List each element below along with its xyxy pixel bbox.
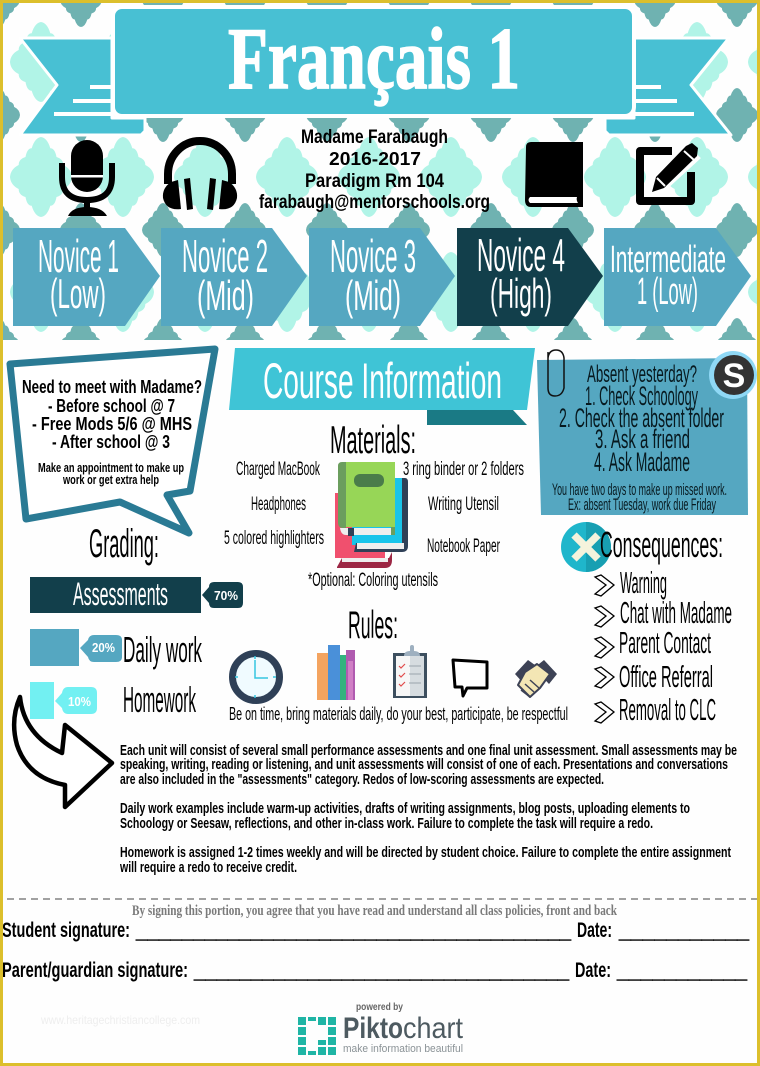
left ribbon tail xyxy=(20,38,145,135)
panel: meeting speech bubble: Need to meet with Madame? xyxy=(22,377,202,397)
chevron: Intermediate 1 xyxy=(604,228,751,326)
chevron: Novice 2: (Mid) xyxy=(197,272,254,319)
chevron: Novice 3 xyxy=(309,228,455,326)
icon: book xyxy=(525,142,583,207)
panel: absent yesterday note xyxy=(537,358,748,515)
materials list: Charged MacBook xyxy=(236,459,320,480)
icon: X circle xyxy=(561,522,611,572)
materials list: Headphones xyxy=(251,494,306,515)
teacher contact information xyxy=(259,127,490,213)
level chevrons xyxy=(13,228,751,326)
text: Daily work xyxy=(123,629,202,670)
icon: microphone xyxy=(62,140,112,216)
icon: paperclip xyxy=(548,350,564,396)
chevron: Novice 1: Novice 1 xyxy=(38,230,119,282)
icon: Schoology badge xyxy=(709,351,757,399)
icon: colored books xyxy=(317,645,355,700)
heading: Materials: Materials: xyxy=(330,419,416,462)
panel: meeting speech bubble: Make an appointment to make up xyxy=(38,460,184,475)
text block: grading explanation xyxy=(119,742,737,876)
student signature line: ___________ xyxy=(618,920,749,943)
materials list xyxy=(224,459,524,591)
parent signature line: Parent/guardian signature: xyxy=(2,959,188,982)
icon: headphones xyxy=(163,141,237,210)
text: Homework xyxy=(123,679,196,720)
teacher contact information: farabaugh@mentorschools.org xyxy=(259,192,490,213)
panel: meeting speech bubble xyxy=(10,349,215,533)
panel: meeting speech bubble: work or get extra help xyxy=(62,472,159,487)
icon: pencil and pad xyxy=(640,143,698,201)
consequences list xyxy=(595,565,732,727)
consequence 3 xyxy=(595,625,711,660)
icon: stack of books xyxy=(335,462,408,568)
parent signature line: Date: xyxy=(575,959,611,982)
text: Grading: xyxy=(89,522,159,566)
materials list: 3 ring binder or 2 folders xyxy=(403,459,524,480)
student signature line: Date: xyxy=(577,919,612,942)
student signature line: Student signature: xyxy=(2,919,130,942)
chevron: Novice 3: Novice 3 xyxy=(330,230,416,282)
teacher contact information: Madame Farabaugh xyxy=(301,127,448,148)
materials list: Writing Utensil xyxy=(428,494,499,515)
student signature line: ______________________________________ xyxy=(135,920,571,943)
parent signature line xyxy=(2,959,747,983)
chevron: Novice 1 xyxy=(13,228,160,326)
title banner xyxy=(113,7,634,116)
heading banner: Course Information: Course Information xyxy=(263,353,502,409)
bar: assessments 70%: 70% xyxy=(214,588,238,603)
chevron: Novice 1: (Low) xyxy=(50,270,106,317)
consequence 4 xyxy=(595,659,713,694)
arrow: hand-drawn pointing right xyxy=(14,697,112,807)
consequence 1 xyxy=(595,565,667,600)
icon: Schoology badge: S xyxy=(723,357,745,395)
right ribbon tail xyxy=(605,38,731,135)
powered by Piktochart logo: make information beautiful xyxy=(343,1043,463,1055)
powered by Piktochart logo: chart xyxy=(403,1012,464,1045)
student signature line xyxy=(2,919,749,943)
consequence 2 xyxy=(595,595,732,630)
materials list: Notebook Paper xyxy=(427,536,500,557)
bar: homework 10% xyxy=(30,679,196,720)
teacher contact information: Paradigm Rm 104 xyxy=(305,171,444,192)
chevron: Novice 2: Novice 2 xyxy=(182,230,268,282)
panel: meeting speech bubble: - Free Mods 5/6 @ MHS xyxy=(32,414,192,434)
watermark: www.heritagechristiancollege.com xyxy=(40,1013,200,1027)
panel: meeting speech bubble: - Before school @ 7 xyxy=(48,396,175,416)
consequences list: Warning xyxy=(620,565,667,600)
powered by Piktochart logo xyxy=(298,1002,464,1055)
powered by Piktochart logo: powered by xyxy=(356,1002,403,1013)
bar: daily work 20%: 20% xyxy=(92,640,115,655)
chevron: Novice 3: (Mid) xyxy=(345,272,401,319)
materials list: 5 colored highlighters xyxy=(224,528,324,549)
heading banner: Course Information xyxy=(229,348,535,425)
title: Français 1 xyxy=(228,11,520,108)
icon: clipboard checklist xyxy=(393,645,427,698)
icon: handshake xyxy=(515,660,557,697)
text: Rules: xyxy=(348,604,398,647)
chevron: Novice 4 xyxy=(457,228,603,326)
text block: grading explanation: will require a redo to receive credit. xyxy=(119,859,297,876)
teacher contact information: 2016-2017 xyxy=(329,149,421,169)
bar: assessments 70%: Assessments xyxy=(73,576,168,612)
bar: daily work 20% xyxy=(30,629,202,670)
parent signature line: ___________ xyxy=(616,960,747,983)
materials list: *Optional: Coloring utensils xyxy=(308,570,438,591)
parent signature line: _________________________________ xyxy=(193,960,569,983)
bar: homework 10%: 10% xyxy=(68,694,91,709)
icon: speech bubble xyxy=(453,660,487,696)
chevron: Intermediate 1: 1 (Low) xyxy=(637,271,698,313)
icon: clock xyxy=(232,654,280,700)
chevron: Novice 2 xyxy=(161,228,307,326)
panel: meeting speech bubble: - After school @ 3 xyxy=(52,432,170,452)
powered by Piktochart logo: Pikto xyxy=(343,1012,403,1045)
chevron: Novice 4: Novice 4 xyxy=(477,229,565,281)
logo mark xyxy=(298,1017,336,1055)
consequence 5 xyxy=(595,692,716,727)
chevron: Novice 4: (High) xyxy=(490,270,552,317)
